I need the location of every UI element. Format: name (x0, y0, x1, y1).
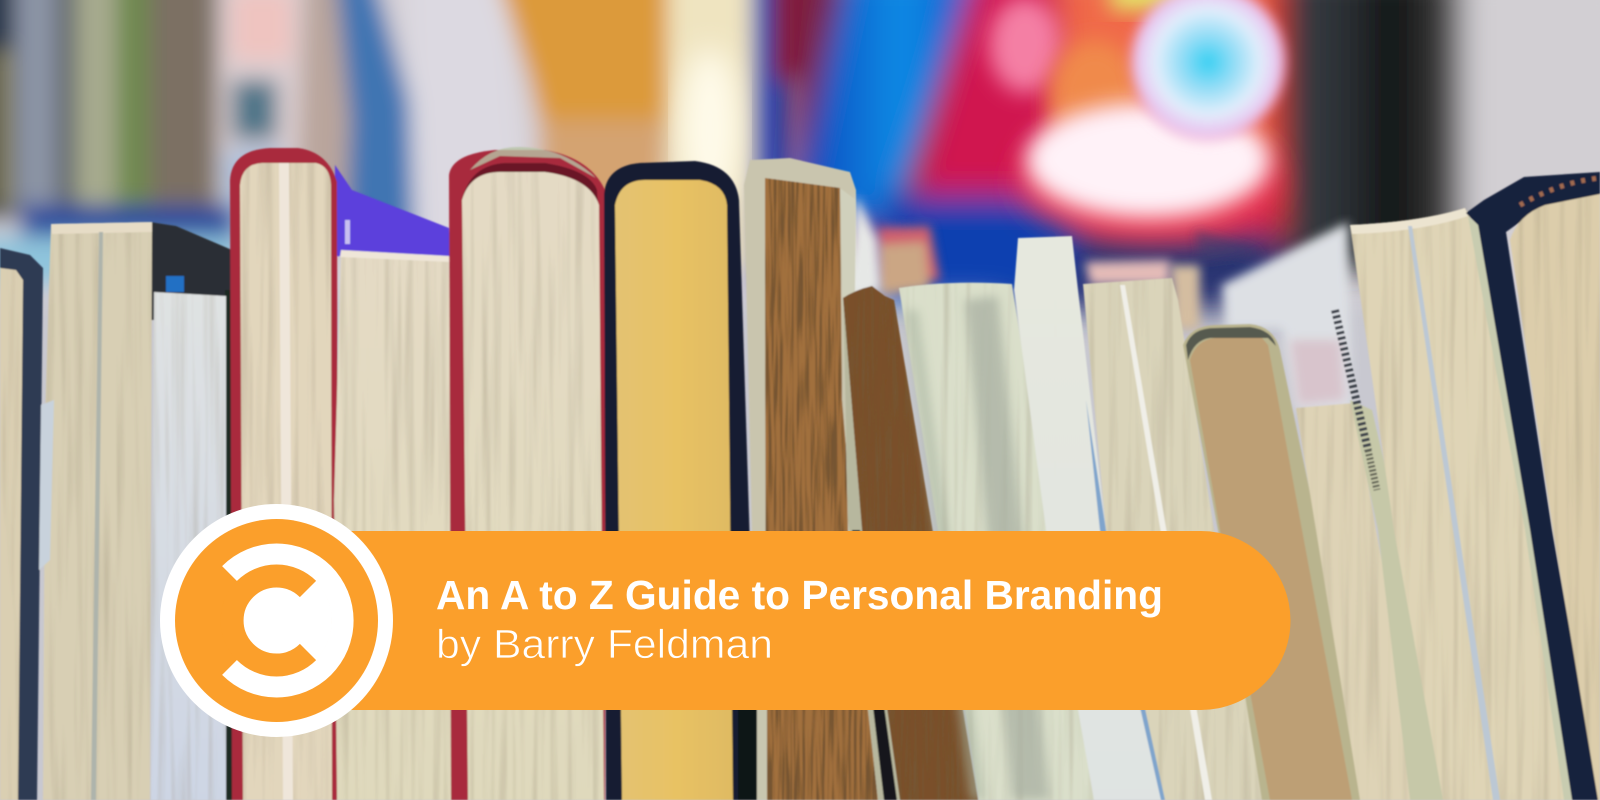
navy hardback right edge (1466, 172, 1600, 800)
pale book behind paperback (1296, 403, 1426, 800)
cream book (334, 250, 459, 800)
red bound book with white stripe (230, 148, 338, 800)
banner pill (340, 531, 1290, 710)
grey green paperback (899, 283, 1100, 800)
navy bound yellow book (604, 161, 758, 800)
right background blurred colours (790, 0, 1600, 310)
purple book (335, 165, 452, 262)
book with grey stripe and dark cover (39, 222, 234, 800)
logo badge (160, 504, 393, 737)
old brown deckled book (738, 158, 885, 800)
logo C mark (221, 544, 354, 698)
blurred jacket behind paperback (1170, 222, 1352, 410)
blurred background shelf (0, 0, 1600, 310)
small pink book behind (878, 226, 1170, 295)
thick cream paperback (1350, 208, 1570, 800)
bright bokeh lights (680, 0, 1292, 242)
title text: An A to Z Guide to Personal Branding (436, 572, 1163, 618)
dark old brown book (843, 286, 978, 800)
far left book (0, 248, 43, 800)
green grey strip and barcode (1335, 310, 1445, 800)
red bound book with stitched headband (449, 147, 605, 800)
pale blue paperback (151, 290, 237, 800)
author byline: by Barry Feldman (436, 621, 773, 667)
cream paperback with white stripe (1083, 278, 1275, 800)
white paperback (1014, 236, 1166, 800)
left background spines (0, 0, 1600, 300)
tan hardback (1183, 324, 1362, 800)
title banner (340, 531, 1290, 710)
